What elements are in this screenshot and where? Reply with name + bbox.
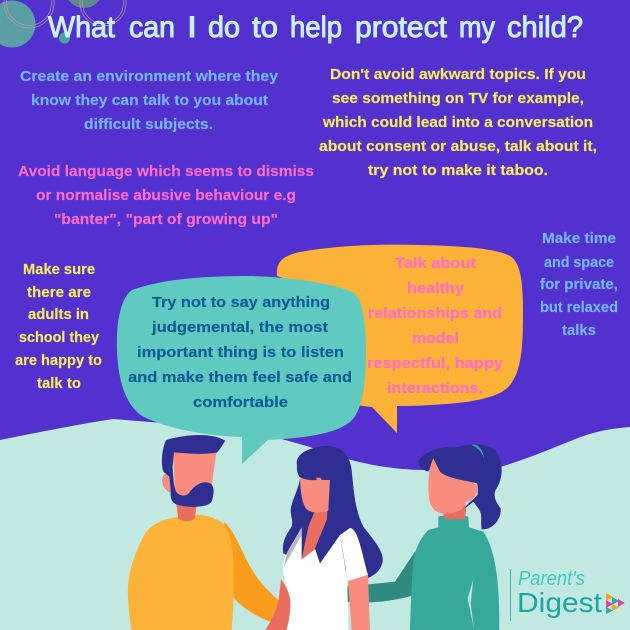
teal bubble text: and make them feel safe and [128, 369, 352, 386]
teal bubble text: important thing is to listen [137, 344, 344, 361]
text block: adults in school: talk to [37, 375, 81, 392]
orange bubble text: relationships and [368, 305, 502, 322]
text block: awkward topics: about consent or abuse, talk about it, [319, 138, 597, 155]
logo: Parent's Digest [510, 568, 625, 621]
text block: private talks: Make time [542, 230, 616, 247]
orange bubble text: respectful, happy [367, 355, 504, 372]
text block: private talks: talks [562, 322, 596, 339]
text block: avoid dismissive language: or normalise abusive behaviour e.g [36, 187, 296, 204]
logo triangles [606, 593, 625, 614]
text block: avoid dismissive language [18, 163, 314, 228]
text block: awkward topics [319, 66, 597, 179]
text block: safe environment: Create an environment where they [20, 68, 279, 85]
text block: adults in school: school they [19, 329, 100, 346]
title: do [208, 11, 240, 44]
orange bubble text: healthy [407, 280, 465, 297]
text block: awkward topics: try not to make it taboo. [368, 162, 548, 179]
title [48, 11, 583, 44]
figure: man in yellow [128, 435, 290, 630]
orange bubble text: Talk about [395, 255, 476, 272]
logo: Parent's Digest: Digest [517, 587, 602, 618]
teal bubble text [128, 294, 352, 411]
background: pale wave [0, 419, 630, 630]
text block: adults in school [15, 261, 102, 392]
text block: safe environment [20, 68, 279, 133]
figure: woman in green [345, 444, 502, 630]
figure: woman in white [266, 446, 383, 630]
orange bubble text [367, 255, 504, 397]
title: child? [507, 11, 583, 44]
text block: avoid dismissive language: "banter", "part of growing up" [54, 211, 278, 228]
title: I [187, 11, 197, 44]
speech bubble: orange [277, 245, 523, 433]
title: What [48, 11, 116, 44]
text block: safe environment: know they can talk to you about [31, 92, 268, 109]
speech bubble: teal [117, 276, 366, 464]
orange bubble text: interactions. [387, 380, 483, 397]
text block: avoid dismissive language: Avoid language which seems to dismiss [18, 163, 314, 180]
text block: adults in school: adults in [28, 306, 89, 323]
logo: Parent's Digest: Parent's [518, 568, 585, 590]
text block: private talks: for private, [540, 276, 618, 293]
title: protect [355, 11, 448, 44]
text block: awkward topics: see something on TV for example, [332, 90, 584, 107]
text block: adults in school: Make sure [23, 261, 95, 278]
text block: private talks: but relaxed [540, 299, 618, 316]
teal bubble text: Try not to say anything [152, 294, 330, 311]
title: can [129, 11, 175, 44]
text block: adults in school: there are [27, 284, 91, 301]
teal bubble text: judgemental, the most [151, 319, 328, 336]
title: help [290, 11, 342, 44]
text block: private talks [540, 230, 618, 339]
teal bubble text: comfortable [193, 394, 288, 411]
text block: private talks: and space [544, 254, 614, 271]
text block: safe environment: difficult subjects. [84, 116, 213, 133]
text block: adults in school: are happy to [15, 352, 102, 369]
title: to [252, 11, 278, 44]
text block: awkward topics: Don't avoid awkward topics. If you [330, 66, 586, 83]
decorative circles [0, 0, 126, 48]
orange bubble text: model [412, 330, 459, 347]
title: my [459, 11, 495, 44]
text block: awkward topics: which could lead into a conversation [322, 114, 593, 131]
